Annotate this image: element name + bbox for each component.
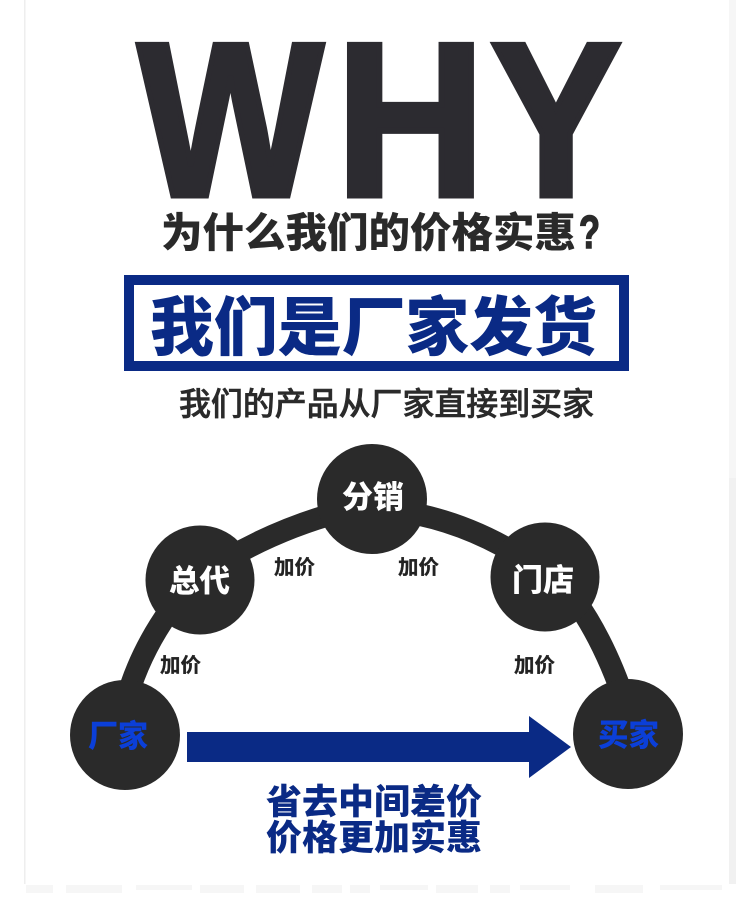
conclusion text: 省去中间差价 bbox=[266, 783, 482, 822]
subtitle: why are our prices good: 为什么我们的价格实惠 bbox=[161, 210, 576, 256]
markup label 3: 加价 bbox=[398, 556, 439, 579]
diagram: distribution arc bbox=[70, 444, 683, 790]
node: buyer: 买家 bbox=[598, 718, 659, 753]
arrow: factory direct to buyer bbox=[187, 716, 571, 778]
markup label 2: 加价 bbox=[274, 556, 315, 579]
node: general agent: 总代 bbox=[169, 564, 230, 599]
node: store bbox=[490, 522, 600, 632]
markup label 1: 加价 bbox=[160, 654, 201, 677]
subtitle: why are our prices good: ? bbox=[579, 206, 600, 258]
node: store: 门店 bbox=[512, 563, 574, 598]
title: WHY bbox=[138, 0, 621, 242]
conclusion text bbox=[266, 783, 482, 858]
title: WHY: Y bbox=[491, 0, 621, 242]
node: distributor: 分销 bbox=[342, 480, 404, 515]
conclusion text: 价格更加实惠 bbox=[266, 818, 482, 858]
node: factory: 厂家 bbox=[88, 719, 148, 754]
panel: factory shipping banner bbox=[129, 280, 624, 366]
node: factory bbox=[70, 680, 180, 790]
banner heading: 我们是厂家发货 bbox=[150, 292, 597, 364]
title: WHY: W bbox=[138, 0, 323, 242]
description text: 我们的产品从厂家直接到买家 bbox=[179, 386, 594, 422]
title: WHY: H bbox=[336, 0, 485, 242]
node: distributor bbox=[317, 444, 427, 554]
markup label 4: 加价 bbox=[514, 654, 555, 677]
node: general agent bbox=[146, 526, 254, 634]
arc connectors bbox=[125, 512, 626, 705]
node: buyer bbox=[573, 679, 683, 789]
